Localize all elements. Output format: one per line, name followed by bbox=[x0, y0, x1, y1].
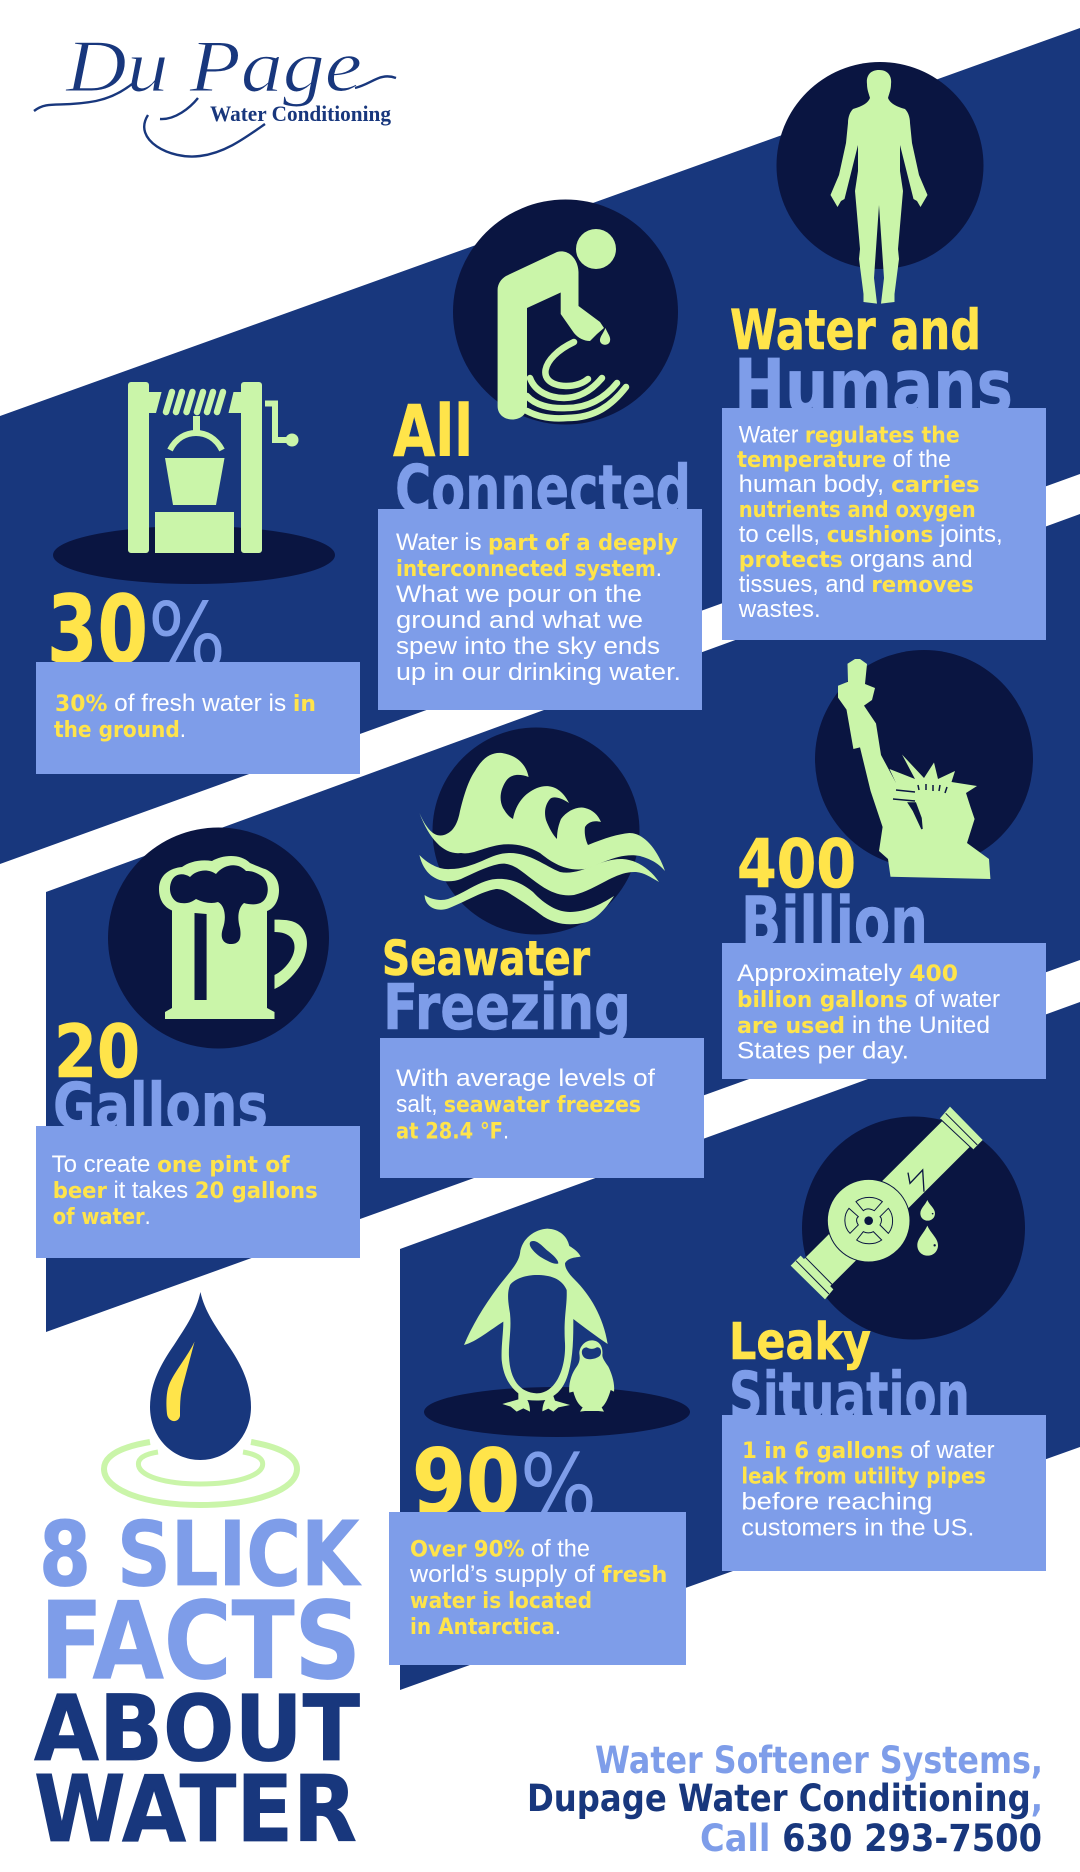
heading: 400 Billion bbox=[737, 825, 928, 962]
text box bbox=[722, 943, 1046, 1079]
text box: before reaching bbox=[741, 1488, 932, 1515]
panel: 20 gallons bbox=[36, 828, 360, 1258]
text box: up in our drinking water. bbox=[396, 659, 681, 686]
icon: leaking pipe with valve bbox=[791, 1107, 1025, 1340]
text box bbox=[36, 1126, 360, 1258]
logo: DuPage Water Conditioning: Water Conditioning bbox=[210, 101, 391, 126]
icon: penguins bbox=[424, 1229, 690, 1437]
title: WATER bbox=[34, 1756, 357, 1863]
text box: tissues, and removes bbox=[739, 571, 974, 598]
icon: waves bbox=[419, 728, 665, 934]
logo: DuPage Water Conditioning: Du Page bbox=[65, 26, 362, 108]
text box: temperature of the bbox=[737, 446, 951, 473]
icon: statue of liberty bbox=[815, 650, 1033, 879]
panel: leaky situation bbox=[722, 1107, 1046, 1571]
text box: at 28.4 °F. bbox=[396, 1118, 509, 1144]
panel: seawater freezing bbox=[380, 728, 704, 1178]
text box: 1 in 6 gallons of water bbox=[742, 1437, 994, 1464]
footer call to action bbox=[527, 1739, 1043, 1860]
text box: protects organs and bbox=[739, 546, 973, 573]
icon: well bbox=[53, 382, 335, 584]
text box: Over 90% of the bbox=[410, 1535, 590, 1562]
text box: 30% of fresh water is in bbox=[55, 690, 316, 717]
text box bbox=[722, 408, 1046, 640]
text box: billion gallons of water bbox=[737, 986, 1000, 1013]
text box: human body, carries bbox=[739, 471, 980, 498]
panel: 400 billion bbox=[722, 650, 1046, 1079]
panel: all connected bbox=[378, 200, 702, 710]
text box: interconnected system. bbox=[396, 555, 662, 582]
text box: What we pour on the bbox=[396, 581, 642, 608]
heading: All Connected: All bbox=[393, 390, 473, 473]
heading: Water and Humans: Water and bbox=[730, 298, 981, 362]
text box bbox=[722, 1415, 1046, 1571]
text box: the ground. bbox=[54, 716, 186, 743]
heading: 20 Gallons: Gallons bbox=[53, 1070, 268, 1143]
background band 3 bbox=[400, 1002, 1080, 1690]
heading: 400 Billion: 400 bbox=[737, 825, 856, 903]
text box: Approximately 400 bbox=[737, 960, 958, 987]
heading: Seawater Freezing: Freezing bbox=[383, 971, 631, 1044]
background band 2 bbox=[46, 514, 1080, 1332]
text box: To create one pint of bbox=[52, 1151, 290, 1178]
title: 8 SLICK bbox=[39, 1502, 362, 1606]
text box: wastes. bbox=[738, 596, 821, 623]
icon: person drinking from fountain bbox=[453, 200, 678, 424]
heading: All Connected: Connected bbox=[395, 451, 691, 528]
text box: customers in the US. bbox=[741, 1515, 974, 1542]
background band 1 bbox=[0, 28, 1080, 864]
heading: 400 Billion: Billion bbox=[741, 883, 928, 962]
text box: salt, seawater freezes bbox=[396, 1091, 641, 1118]
icon: human body bbox=[776, 62, 984, 304]
heading: 90% bbox=[412, 1430, 597, 1540]
text box bbox=[389, 1512, 686, 1665]
panel: water and humans bbox=[722, 62, 1046, 640]
footer call to action: Call 630 293-7500 bbox=[700, 1817, 1042, 1860]
text box bbox=[378, 509, 702, 710]
text box: are used in the United bbox=[737, 1012, 990, 1039]
text box: nutrients and oxygen bbox=[739, 498, 976, 523]
heading: Leaky Situation: Situation bbox=[729, 1359, 970, 1432]
heading: All Connected bbox=[393, 390, 691, 528]
heading: 30%: % bbox=[148, 583, 226, 690]
title: FACTS bbox=[40, 1580, 361, 1704]
text box: world’s supply of fresh bbox=[409, 1561, 667, 1588]
heading: 30% bbox=[47, 576, 226, 690]
text box: water is located bbox=[410, 1589, 592, 1614]
heading: Water and Humans bbox=[730, 298, 1013, 430]
text box bbox=[36, 662, 360, 774]
heading: Seawater Freezing bbox=[382, 931, 631, 1044]
title: ABOUT bbox=[34, 1677, 360, 1782]
heading: 30%: 30 bbox=[47, 576, 148, 685]
heading: 90%: 90 bbox=[412, 1430, 520, 1535]
text box: beer it takes 20 gallons bbox=[53, 1177, 318, 1204]
text box: to cells, cushions joints, bbox=[739, 521, 1003, 548]
icon: beer mug bbox=[108, 828, 329, 1048]
heading: Leaky Situation: Leaky bbox=[729, 1313, 871, 1372]
heading: Water and Humans: Humans bbox=[734, 344, 1013, 430]
heading: 90%: % bbox=[520, 1435, 597, 1540]
heading: Seawater Freezing: Seawater bbox=[382, 931, 590, 987]
heading: Leaky Situation bbox=[729, 1313, 970, 1432]
text box: With average levels of bbox=[396, 1065, 655, 1092]
text box: Water regulates the bbox=[739, 422, 960, 448]
logo: DuPage Water Conditioning bbox=[34, 26, 396, 157]
panel: 90% in Antarctica bbox=[389, 1229, 690, 1665]
text box: Water is part of a deeply bbox=[396, 529, 678, 556]
icon: water drop with ripples bbox=[104, 1292, 297, 1505]
title bbox=[34, 1502, 362, 1863]
text box: States per day. bbox=[737, 1038, 909, 1064]
heading: 20 Gallons: 20 bbox=[54, 1010, 140, 1095]
text box: ground and what we bbox=[396, 607, 643, 634]
text box bbox=[380, 1038, 704, 1178]
text box: leak from utility pipes bbox=[741, 1465, 986, 1490]
text box: in Antarctica. bbox=[410, 1613, 561, 1640]
text box: of water. bbox=[53, 1203, 151, 1230]
heading: 20 Gallons bbox=[53, 1010, 268, 1143]
text box: spew into the sky ends bbox=[396, 633, 660, 660]
panel: 30% fresh water in the ground bbox=[36, 382, 360, 774]
